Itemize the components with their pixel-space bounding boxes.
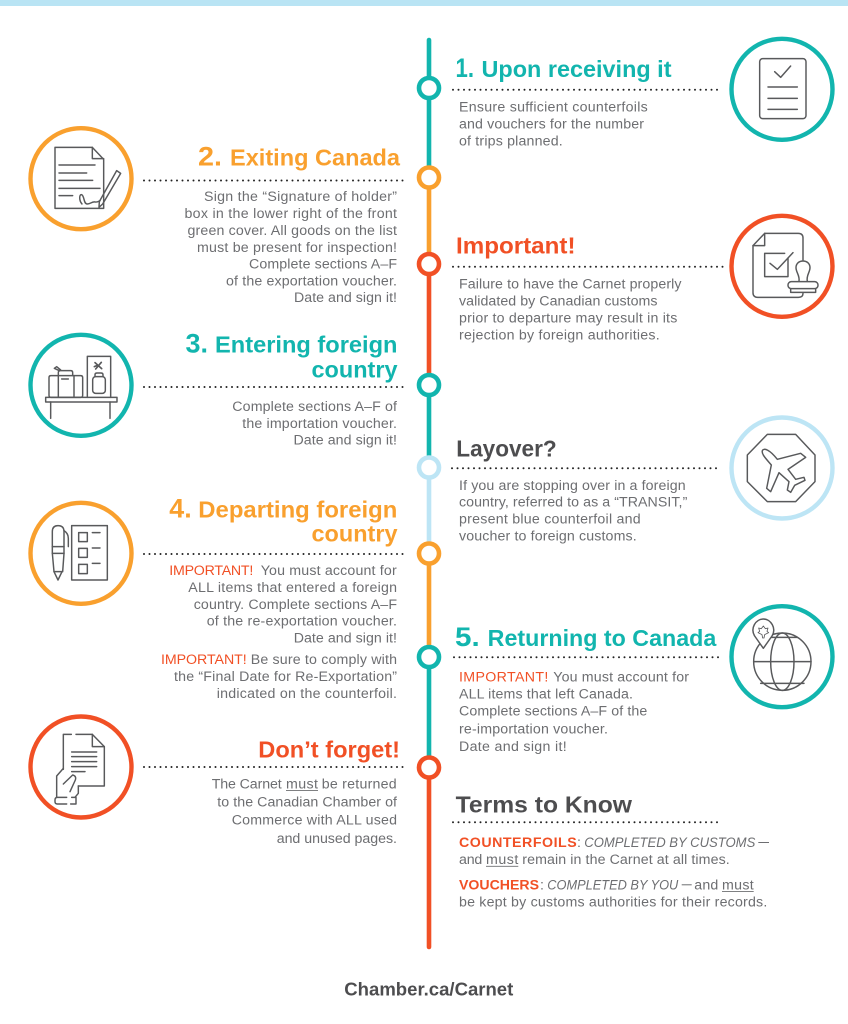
text: important body: validated by Canadian customs [459,294,658,310]
text: layover body [459,478,688,544]
text: step 4 body: indicated on the counterfoil. [217,686,397,702]
text: step 2 body: Date and sign it! [294,290,397,306]
heading: step 4 [169,493,398,546]
text: counterfoils: remain in the Carnet at all times. [522,852,730,868]
panel: step 3 entering foreign country [30,329,403,449]
heading: step 3: 3. [186,329,208,359]
text: important body: Failure to have the Carnet properly [459,277,682,293]
text: step 4 body [161,563,397,702]
text: counterfoils: : [577,835,581,851]
heading: important: Important! [456,232,576,258]
heading: step 5: 5. [455,622,480,652]
text: step 4 body: the “Final Date for Re-Exportation” [174,669,397,685]
text: step 2 body: of the exportation voucher. [226,273,397,289]
heading: step 3: country [312,356,398,382]
icon: document with stamp [732,216,832,317]
text: step 5 body: re-importation voucher. [459,721,608,737]
panel: step 1 upon receiving it [453,39,832,149]
text: counterfoils: must [486,852,518,868]
text: counterfoils: COMPLETED BY CUSTOMS [584,835,756,851]
text: counterfoils: and [459,852,482,868]
text: vouchers: and [694,877,718,893]
text: step 5 body: IMPORTANT! [459,670,548,686]
text: step 4 body: Date and sign it! [294,630,397,646]
text: step 2 body: Complete sections A–F [249,257,397,273]
text: vouchers [459,877,767,910]
heading: step 1: 1. [456,53,474,83]
text: step 1 body [459,100,648,149]
text: step 4 body: ALL items that entered a foreign [188,580,397,596]
text: step 4 body: You must account for [261,563,397,579]
icon: plane in octagon [732,418,832,518]
icon: globe with maple leaf pin [732,606,832,707]
text: don't forget body: Commerce with ALL used [232,813,397,829]
text: important body: rejection by foreign authorities. [459,328,660,344]
top bar [0,0,848,6]
text: step 4 body: country. Complete sections A–F [194,597,397,613]
text: layover body: present blue counterfoil and [459,512,641,528]
panel: step 2 exiting canada [30,128,403,306]
text: important body [459,277,682,344]
panel: terms to know [453,791,769,910]
panel: don't forget [30,716,403,847]
text: step 5 body: Date and sign it! [459,739,567,755]
text: step 5 body [459,670,689,755]
text: step 4 body: Be sure to comply with [251,652,397,668]
text: step 3 body [232,399,397,449]
text: step 4 body: IMPORTANT! [169,563,253,579]
text: step 5 body: Complete sections A–F of the [459,703,647,719]
heading: step 5: Returning to Canada [488,625,717,651]
text: don't forget body: The Carnet [212,776,282,792]
text: step 5 body: You must account for [553,670,689,686]
text: vouchers: be kept by customs authorities for their records. [459,894,767,910]
text: step 3 body: the importation voucher. [242,416,397,432]
icon: luggage on table [30,335,132,436]
heading: step 4: country [312,520,398,546]
heading: step 4: Departing foreign [198,496,397,522]
heading: don't forget: Don’t forget! [258,736,400,762]
heading: step 3 [186,329,398,382]
text: layover body: voucher to foreign customs. [459,528,637,544]
text: important body: prior to departure may result in its [459,311,677,327]
text: step 4 body: IMPORTANT! [161,652,247,668]
text: layover body: country, referred to as a “TRANSIT,” [459,495,688,511]
timeline [419,40,439,947]
text: don't forget body [212,776,397,847]
text: vouchers: VOUCHERS [459,877,539,893]
heading: step 1: Upon receiving it [482,56,672,82]
panel: important [453,216,832,344]
panel: layover [452,418,832,544]
text: don't forget body: to the Canadian Chamber of [217,795,397,811]
text: step 1 body: and vouchers for the number [459,117,644,133]
text: step 1 body: Ensure sufficient counterfoils [459,100,648,116]
icon: hand holding document [30,716,132,818]
text: step 2 body [184,189,397,306]
footer url: Chamber.ca/Carnet [344,979,513,1000]
icon: signed document [30,128,132,229]
icon: checked document [732,39,832,140]
text: step 2 body: box in the lower right of the front [184,206,397,222]
heading: layover: Layover? [456,436,557,462]
text: don't forget body: must [286,776,318,792]
text: vouchers: : [540,877,544,893]
text: vouchers: COMPLETED BY YOU [547,877,679,893]
text: counterfoils: COUNTERFOILS [459,835,577,851]
text: step 2 body: green cover. All goods on the list [188,223,397,239]
text: counterfoils [459,835,769,868]
text: don't forget body: and unused pages. [277,831,397,847]
text: step 5 body: ALL items that left Canada. [459,686,633,702]
panel: step 5 returning to canada [454,606,832,755]
heading: step 2: 2. [198,142,222,172]
text: layover body: If you are stopping over in a foreign [459,478,686,494]
text: step 2 body: Sign the “Signature of holder” [204,189,397,205]
text: step 3 body: Complete sections A–F of [232,399,397,415]
text: don't forget body: be returned [322,776,397,792]
text: step 3 body: Date and sign it! [294,433,397,449]
text: step 4 body: of the re-exportation voucher. [207,614,397,630]
text: step 1 body: of trips planned. [459,133,563,149]
heading: step 4: 4. [169,493,192,523]
panel: step 4 departing foreign country [30,493,403,702]
heading: step 3: Entering foreign [215,332,398,358]
icon: pen and checklist [30,503,132,604]
text: vouchers: must [722,877,754,893]
heading: step 2: Exiting Canada [230,145,400,171]
heading: terms to know: Terms to Know [456,791,632,817]
text: step 2 body: must be present for inspection! [197,240,397,256]
